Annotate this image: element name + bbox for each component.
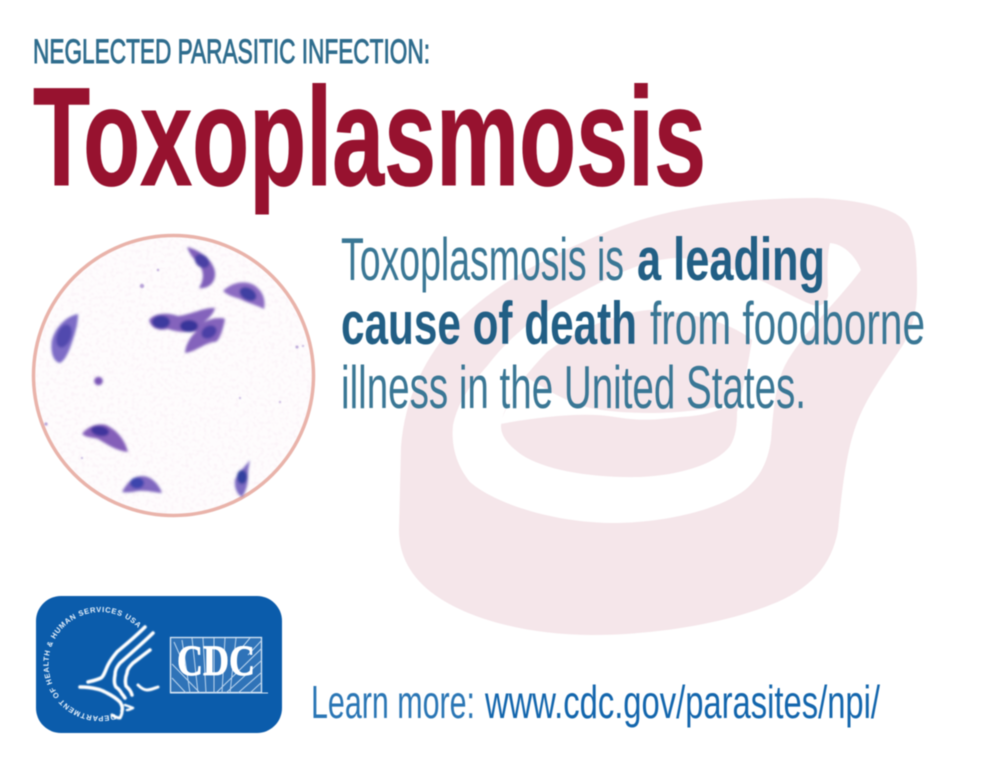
text block: leading cause of death: a leading: [637, 226, 825, 293]
icon: eagle: [80, 627, 158, 718]
small specks: [44, 269, 304, 459]
speckle stain: [187, 466, 188, 467]
link: learn more: Learn more:: [311, 676, 475, 728]
text block: leading cause of death: cause of death: [341, 290, 637, 357]
parasite: lower right: [235, 460, 250, 497]
hatching: [172, 638, 262, 693]
text block: leading cause of death: [341, 226, 925, 421]
parasite: upper right: [223, 282, 265, 309]
heading: neglected parasitic infection: NEGLECTED PARASITIC INFECTION:: [33, 33, 430, 71]
logo: HHS and CDC badge: [35, 595, 283, 734]
parasite: central cluster: [149, 308, 225, 353]
parasite: bottom: [122, 476, 162, 493]
parasite: left: [51, 314, 78, 363]
CDC box: CDC: [177, 638, 255, 685]
seal ring text: DEPARTMENT OF HEALTH & HUMAN SERVICES USA: [42, 606, 141, 722]
text block: leading cause of death: Toxoplasmosis is: [341, 226, 624, 293]
parasite: top crescent: [187, 247, 215, 288]
link: learn more: [311, 676, 880, 728]
panel: microscope circle: [34, 236, 314, 516]
icon: meat cut watermark: [399, 198, 917, 635]
parasite: lower left crescent: [82, 424, 128, 452]
parasite: small dot: [94, 377, 103, 385]
